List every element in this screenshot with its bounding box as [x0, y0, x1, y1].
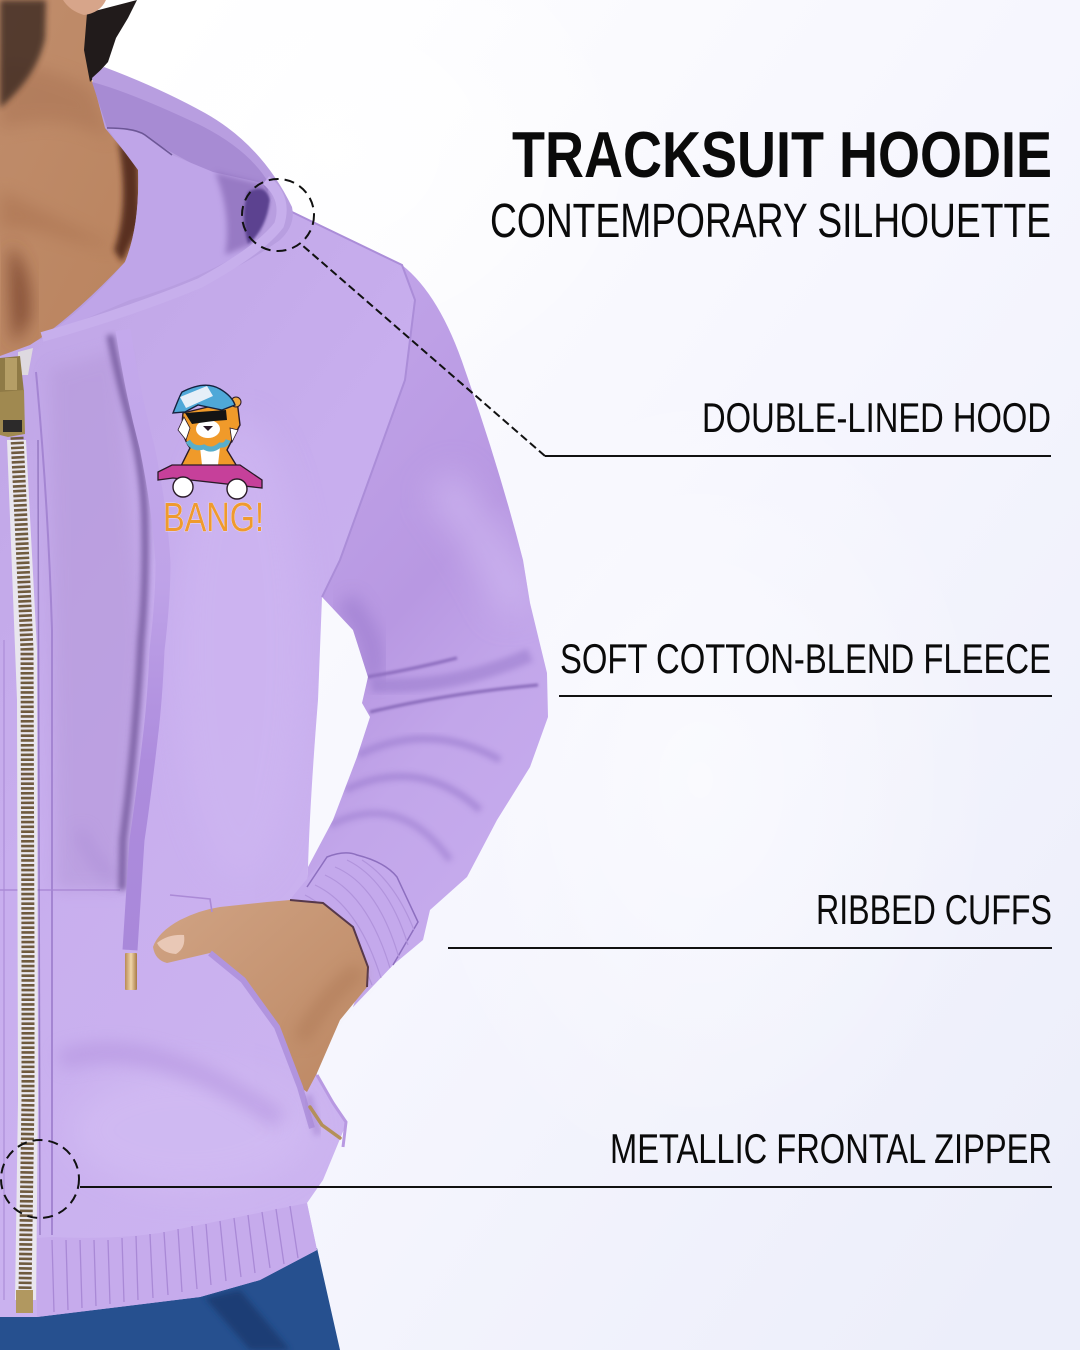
sleeve folds — [330, 480, 538, 860]
feet — [173, 477, 247, 499]
photo: model wearing hoodie — [0, 0, 548, 1350]
beard — [0, 0, 46, 108]
hood rim — [42, 180, 282, 337]
sleeve — [290, 265, 548, 1007]
metallic zipper — [0, 348, 38, 1313]
dj deck — [158, 465, 262, 488]
callout: double-lined hood — [242, 179, 1051, 456]
sunglasses — [185, 410, 227, 424]
hood outer — [38, 67, 293, 340]
drawstring — [123, 330, 163, 950]
neck and chest skin — [0, 0, 170, 358]
headphones — [188, 440, 228, 449]
logo: DJ tiger badge — [158, 385, 264, 540]
shorts — [0, 1248, 340, 1350]
ear — [63, 0, 106, 15]
cap — [173, 385, 235, 413]
fleece leader — [559, 695, 1052, 697]
hood callout dashed leader — [302, 245, 545, 456]
cuffs leader — [448, 947, 1052, 949]
hair — [84, 0, 137, 82]
cap front panel — [180, 386, 213, 408]
drawstring aglet — [125, 953, 137, 990]
zipper leader — [80, 1186, 1052, 1188]
hood callout leader — [545, 455, 1051, 457]
brand text: BANG! — [163, 494, 264, 540]
hood shadow — [107, 128, 270, 255]
placket seams and drawstring shadow — [4, 335, 145, 1300]
zipper marker — [1, 1140, 79, 1218]
hand in pocket — [153, 900, 368, 1092]
raglan seam — [292, 212, 415, 597]
hood callout marker — [242, 179, 314, 251]
ribbed cuff — [290, 853, 418, 1007]
pocket edge — [0, 890, 346, 1147]
callout: metallic zipper — [1, 1125, 1052, 1218]
hood inner lining — [92, 82, 270, 205]
tiger head and body — [178, 397, 241, 468]
pocket zipper pull — [310, 1107, 340, 1138]
hem rib — [37, 1203, 317, 1317]
hoodie torso — [0, 212, 415, 1317]
torso shading — [56, 361, 276, 1154]
hood flap — [45, 128, 272, 336]
